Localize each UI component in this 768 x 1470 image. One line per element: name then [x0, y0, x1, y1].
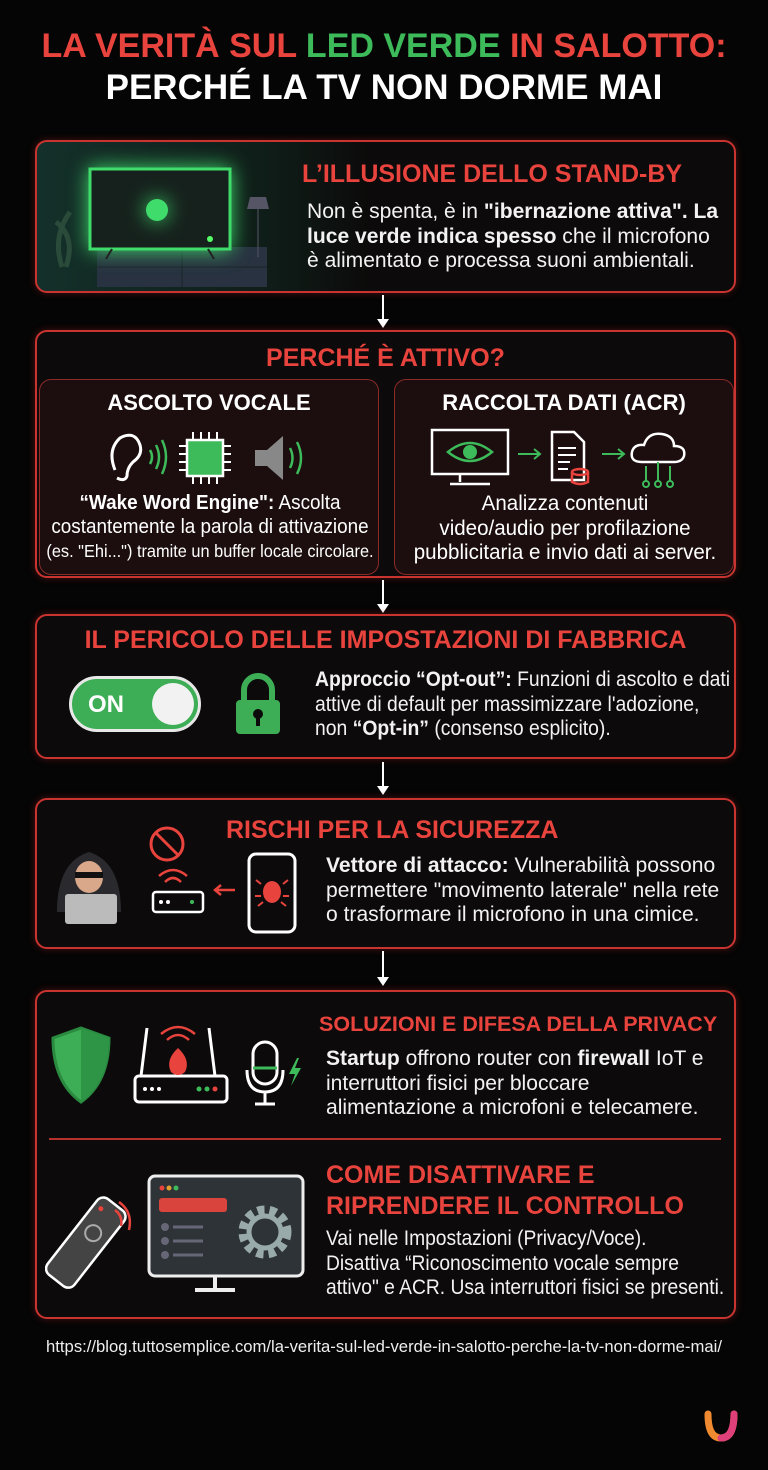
heading: soluzioni: SOLUZIONI E DIFESA DELLA PRIVACY	[319, 1012, 717, 1036]
sub-panel: raccolta dati: Analizza contenuti	[482, 491, 648, 515]
text: è alimentato e processa suoni ambientali.	[307, 248, 695, 272]
heading: disattivare: RIPRENDERE IL CONTROLLO	[326, 1192, 684, 1220]
text: attive di default per massimizzare l'adozione,	[315, 692, 699, 716]
arrow	[377, 951, 389, 986]
panel: rischi sicurezza	[35, 798, 736, 949]
text: luce verde indica spesso che il microfono	[307, 224, 710, 248]
text	[315, 667, 730, 740]
panel: soluzioni e disattivare	[35, 990, 736, 1319]
text: disattivare: Vai nelle Impostazioni (Privacy/Voce).	[326, 1226, 646, 1250]
text: disattivare: Disattiva “Riconoscimento vocale sempre	[326, 1250, 679, 1274]
panel: perché è attivo	[35, 330, 736, 578]
text: Vettore di attacco: Vulnerabilità possono	[326, 853, 715, 877]
panel: impostazioni di fabbrica	[35, 614, 736, 759]
icons: monitor eye, document, cloud	[430, 428, 686, 488]
arrow	[377, 762, 389, 795]
panel: stand-by	[35, 140, 736, 293]
text: o trasformare il microfono in una cimice.	[326, 902, 700, 926]
text: permettere "movimento laterale" nella rete	[326, 878, 719, 902]
sub-panel: raccolta dati	[394, 379, 734, 575]
title: LA VERITÀ SUL LED VERDE IN SALOTTO:	[41, 27, 727, 65]
heading: PERCHÉ È ATTIVO?	[266, 344, 505, 372]
arrow	[377, 295, 389, 328]
title	[41, 26, 727, 107]
sub-panel: ascolto vocale: (es. "Ehi...") tramite un buffer locale circolare.	[46, 541, 374, 561]
heading: L’ILLUSIONE DELLO STAND-BY	[302, 160, 682, 188]
text: soluzioni: alimentazione a microfoni e telecamere.	[326, 1095, 698, 1119]
text	[307, 199, 718, 272]
text: soluzioni	[326, 1046, 704, 1119]
text: Non è spenta, è in "ibernazione attiva". La	[307, 199, 718, 223]
source url: https://blog.tuttosemplice.com/la-verita-sul-led-verde-in-salotto-perche-la-tv-non-dorme-mai/	[46, 1337, 722, 1356]
sub-panel: ascolto vocale: ASCOLTO VOCALE	[107, 390, 311, 415]
icon: toggle ON	[69, 676, 201, 732]
heading: RISCHI PER LA SICUREZZA	[226, 816, 558, 844]
icon: tv in living room	[54, 152, 269, 287]
icons: shield, router firewall, mic	[52, 1026, 301, 1106]
logo	[704, 1410, 738, 1442]
icon: hacker, router, phone	[57, 826, 296, 934]
text: soluzioni: Startup offrono router con firewall IoT e	[326, 1046, 704, 1070]
icons: remote and settings screen	[45, 1174, 304, 1292]
icon: lock	[236, 673, 280, 734]
text: disattivare	[326, 1226, 724, 1299]
heading: disattivare	[326, 1161, 684, 1220]
sub-panel: raccolta dati: pubblicitaria e invio dati ai server.	[414, 540, 716, 564]
arrow	[377, 580, 389, 613]
heading: disattivare: COME DISATTIVARE E	[326, 1161, 595, 1189]
sub-panel: ascolto vocale: costantemente la parola di attivazione	[51, 516, 369, 538]
text: Approccio “Opt-out”: Funzioni di ascolto e dati	[315, 667, 730, 691]
sub-panel: raccolta dati: video/audio per profilazione	[439, 516, 691, 540]
text	[326, 853, 719, 926]
icon: toggle ON: ON	[88, 691, 124, 718]
sub-panel: raccolta dati: RACCOLTA DATI (ACR)	[442, 390, 686, 415]
icons: ear, chip, speaker	[110, 432, 302, 484]
text: soluzioni: interruttori fisici per bloccare	[326, 1070, 589, 1094]
sub-panel: ascolto vocale	[39, 379, 379, 575]
sub-panel: ascolto vocale: “Wake Word Engine": Ascolta	[79, 492, 341, 514]
heading: IL PERICOLO DELLE IMPOSTAZIONI DI FABBRICA	[85, 626, 686, 654]
text: disattivare: attivo" e ACR. Usa interruttori fisici se presenti.	[326, 1275, 724, 1299]
title: PERCHÉ LA TV NON DORME MAI	[106, 68, 662, 107]
text: non “Opt-in” (consenso esplicito).	[315, 716, 611, 740]
